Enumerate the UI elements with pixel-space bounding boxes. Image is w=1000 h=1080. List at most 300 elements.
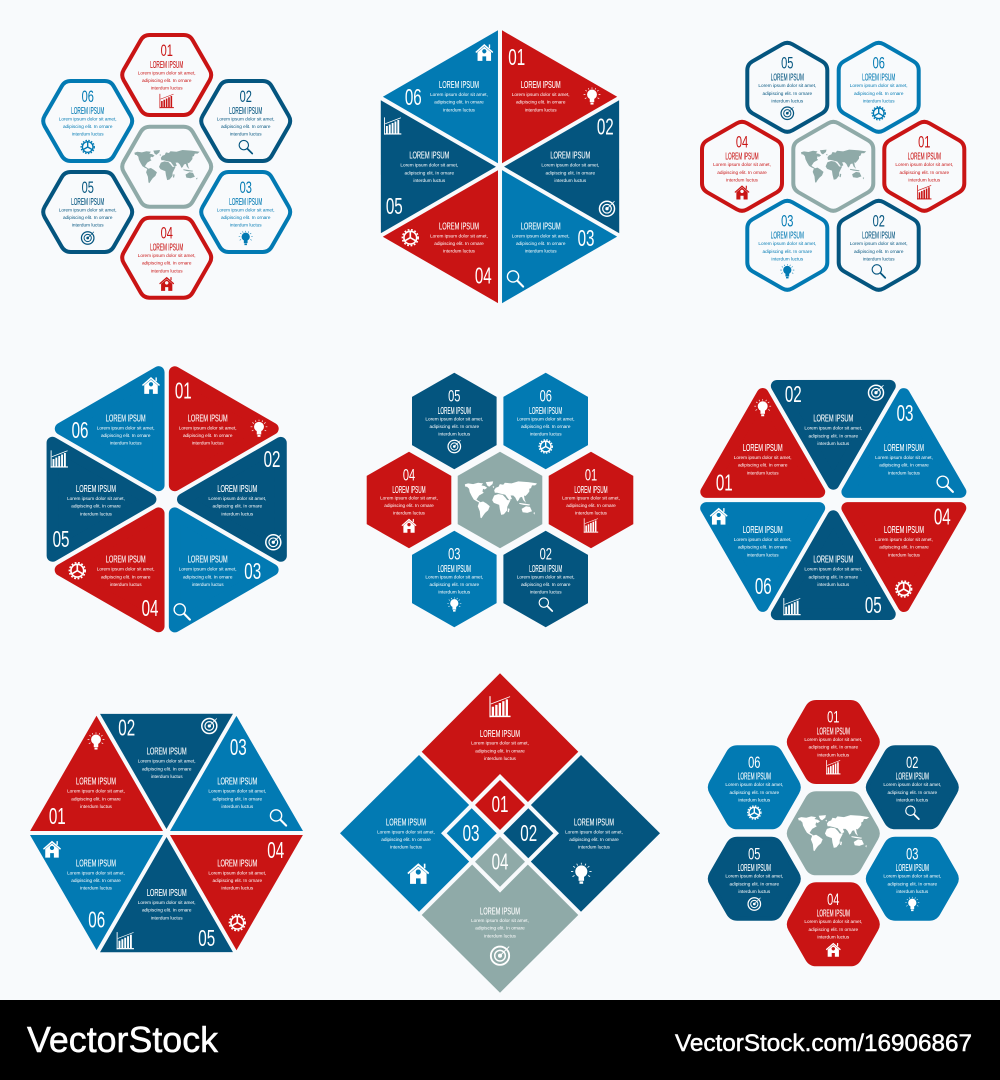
hexagon 01: 01 bbox=[161, 41, 173, 59]
hexagon 03: Lorem ipsum dolor sit amet, bbox=[425, 574, 483, 579]
hexagon 01: Lorem ipsum dolor sit amet, bbox=[895, 162, 953, 167]
segment 06 bbox=[383, 0, 556, 163]
segment 03: Lorem ipsum dolor sit amet, bbox=[208, 789, 266, 794]
segment 06: LOREM IPSUM bbox=[106, 411, 146, 424]
hexagon 03 bbox=[412, 531, 497, 627]
panel: rounded triangle hexagon, middle right bbox=[678, 337, 989, 663]
hexagon 06: adipiscing elit. In ornare bbox=[730, 790, 779, 795]
segment 06: LOREM IPSUM bbox=[76, 856, 116, 869]
text block 01 bbox=[471, 727, 529, 761]
hexagon 01: interdum luctus bbox=[908, 178, 941, 183]
segment 06: 06 bbox=[72, 418, 88, 444]
large diamond 04 bbox=[422, 837, 578, 993]
segment 04 bbox=[170, 835, 303, 950]
segment 01: interdum luctus bbox=[80, 804, 113, 809]
segment 06: interdum luctus bbox=[80, 886, 113, 891]
segment 01: LOREM IPSUM bbox=[743, 441, 783, 453]
segment 04: interdum luctus bbox=[888, 552, 921, 557]
hexagon 06: Lorem ipsum dolor sit amet, bbox=[725, 782, 783, 787]
segment 06: Lorem ipsum dolor sit amet, bbox=[97, 425, 155, 430]
segment 02: LOREM IPSUM bbox=[550, 149, 590, 161]
segment 05: Lorem ipsum dolor sit amet, bbox=[804, 567, 862, 572]
hexagon 06: LOREM IPSUM bbox=[738, 771, 771, 782]
hexagon 03: interdum luctus bbox=[896, 889, 929, 894]
segment 01 bbox=[175, 372, 273, 485]
segment 05: LOREM IPSUM bbox=[147, 886, 187, 898]
hexagon 05: interdum luctus bbox=[438, 432, 471, 437]
hexagon 02: Lorem ipsum dolor sit amet, bbox=[883, 782, 941, 787]
text block 03: adipiscing elit. In ornare bbox=[381, 837, 431, 842]
hexagon 03: 03 bbox=[906, 844, 919, 863]
segment 03 bbox=[126, 513, 273, 655]
segment 02: adipiscing elit. In ornare bbox=[546, 170, 595, 175]
hexagon 02: interdum luctus bbox=[530, 590, 562, 595]
hexagon 05: interdum luctus bbox=[738, 889, 771, 894]
text block 01: LOREM IPSUM bbox=[480, 727, 520, 739]
hexagon 06: LOREM IPSUM bbox=[862, 72, 895, 83]
segment 03: interdum luctus bbox=[192, 582, 224, 587]
number 03: 03 bbox=[463, 821, 479, 847]
segment 02: 02 bbox=[118, 716, 135, 742]
segment 02: interdum luctus bbox=[554, 178, 587, 183]
hexagon 03 bbox=[747, 201, 827, 290]
hexagon 02: adipiscing elit. In ornare bbox=[221, 124, 271, 129]
hexagon 01 bbox=[122, 35, 211, 115]
hexagon 03: 03 bbox=[448, 544, 461, 563]
hexagon 02 bbox=[503, 531, 588, 627]
hexagon 01: adipiscing elit. In ornare bbox=[809, 745, 858, 750]
segment 04: adipiscing elit. In ornare bbox=[213, 878, 262, 883]
hexagon 05 bbox=[747, 43, 827, 132]
large diamond 02 bbox=[502, 755, 660, 912]
hexagon 03: interdum luctus bbox=[438, 590, 471, 595]
footer background bbox=[0, 1000, 1000, 1080]
segment 06: Lorem ipsum dolor sit amet, bbox=[430, 92, 488, 97]
text block 03 bbox=[377, 816, 435, 850]
segment 04: adipiscing elit. In ornare bbox=[879, 545, 929, 550]
segment 02: LOREM IPSUM bbox=[217, 482, 257, 494]
hexagon 05: LOREM IPSUM bbox=[438, 405, 471, 417]
panel: rounded triangle hexagon, middle left bbox=[4, 344, 330, 655]
hexagon 02: LOREM IPSUM bbox=[229, 105, 262, 116]
segment 04: interdum luctus bbox=[443, 249, 476, 254]
hexagon 05: 05 bbox=[748, 844, 761, 863]
hexagon 04: adipiscing elit. In ornare bbox=[384, 503, 434, 508]
segment 06: 06 bbox=[755, 574, 772, 600]
hexagon 06: interdum luctus bbox=[72, 132, 104, 137]
segment 01: interdum luctus bbox=[192, 441, 224, 446]
segment 05: Lorem ipsum dolor sit amet, bbox=[400, 163, 458, 168]
segment 04: 04 bbox=[934, 505, 951, 531]
hexagon 04: interdum luctus bbox=[817, 935, 850, 940]
hexagon 02 bbox=[839, 201, 919, 290]
segment 06: LOREM IPSUM bbox=[743, 523, 783, 535]
segment 04: LOREM IPSUM bbox=[106, 553, 146, 565]
segment 01: adipiscing elit. In ornare bbox=[183, 433, 233, 438]
segment 05: interdum luctus bbox=[817, 582, 850, 587]
segment 05 bbox=[323, 67, 496, 233]
hexagon 05 bbox=[710, 839, 799, 919]
hexagon 03: adipiscing elit. In ornare bbox=[221, 215, 271, 220]
hexagon 05: 05 bbox=[781, 53, 794, 72]
hexagon 01 bbox=[549, 452, 633, 548]
hexagon 03: adipiscing elit. In ornare bbox=[888, 881, 937, 886]
segment 06: adipiscing elit. In ornare bbox=[101, 433, 151, 438]
segment 05: LOREM IPSUM bbox=[813, 553, 853, 565]
hexagon 04: 04 bbox=[827, 890, 840, 908]
hexagon 02: LOREM IPSUM bbox=[529, 563, 562, 575]
segment 05: interdum luctus bbox=[80, 511, 113, 516]
hexagon 03: LOREM IPSUM bbox=[896, 862, 929, 874]
segment 05: interdum luctus bbox=[413, 178, 446, 183]
hexagon 06: 06 bbox=[82, 87, 94, 105]
text block 04: LOREM IPSUM bbox=[480, 904, 520, 917]
hexagon 06: Lorem ipsum dolor sit amet, bbox=[59, 116, 117, 121]
segment 01: adipiscing elit. In ornare bbox=[71, 796, 121, 801]
hexagon 01: 01 bbox=[918, 132, 931, 151]
hexagon 06 bbox=[43, 81, 132, 161]
segment 03: interdum luctus bbox=[525, 249, 557, 254]
hexagon 01: interdum luctus bbox=[575, 511, 608, 516]
hexagon 01: 01 bbox=[827, 707, 840, 726]
segment 06: interdum luctus bbox=[747, 552, 779, 557]
segment 01: interdum luctus bbox=[747, 470, 779, 475]
segment 03: LOREM IPSUM bbox=[521, 219, 561, 232]
hexagon 05: Lorem ipsum dolor sit amet, bbox=[59, 207, 117, 212]
hexagon 01: LOREM IPSUM bbox=[150, 59, 183, 70]
segment 05: adipiscing elit. In ornare bbox=[142, 908, 192, 913]
segment 01: Lorem ipsum dolor sit amet, bbox=[179, 425, 237, 430]
hexagon 04: Lorem ipsum dolor sit amet, bbox=[713, 162, 771, 167]
hexagon 03: 03 bbox=[240, 178, 252, 196]
segment 04: Lorem ipsum dolor sit amet, bbox=[430, 233, 488, 238]
hexagon 05 bbox=[43, 172, 132, 252]
hexagon 03: LOREM IPSUM bbox=[438, 563, 471, 575]
hexagon 03 bbox=[868, 839, 957, 919]
hexagon 02: interdum luctus bbox=[230, 132, 262, 137]
hexagon 05: LOREM IPSUM bbox=[738, 862, 771, 874]
segment 02: adipiscing elit. In ornare bbox=[142, 766, 192, 771]
segment 04: LOREM IPSUM bbox=[884, 523, 924, 535]
hexagon 04: 04 bbox=[403, 465, 415, 484]
centre hexagon with world map bbox=[789, 793, 878, 873]
segment 06: 06 bbox=[405, 85, 422, 111]
segment 04: LOREM IPSUM bbox=[439, 219, 479, 232]
segment 02: 02 bbox=[597, 115, 614, 141]
segment 06 bbox=[61, 344, 207, 485]
hexagon 04: interdum luctus bbox=[726, 178, 759, 183]
hexagon 03: adipiscing elit. In ornare bbox=[763, 249, 812, 254]
segment 02: adipiscing elit. In ornare bbox=[213, 504, 262, 509]
hexagon 05: adipiscing elit. In ornare bbox=[430, 424, 479, 429]
hexagon 03: interdum luctus bbox=[230, 223, 262, 228]
segment 05: LOREM IPSUM bbox=[409, 149, 449, 161]
segment 06 bbox=[0, 777, 163, 950]
segment 04: 04 bbox=[475, 264, 492, 290]
hexagon 03 bbox=[201, 172, 290, 252]
hexagon 06 bbox=[710, 747, 799, 827]
segment 01: 01 bbox=[508, 45, 525, 71]
hexagon 05: Lorem ipsum dolor sit amet, bbox=[425, 416, 483, 421]
hexagon 04: LOREM IPSUM bbox=[150, 242, 183, 253]
segment 05: 05 bbox=[198, 926, 215, 952]
segment 01: LOREM IPSUM bbox=[521, 78, 561, 90]
hexagon 02: Lorem ipsum dolor sit amet, bbox=[217, 116, 275, 121]
hexagon 06 bbox=[503, 373, 588, 469]
hexagon 03: Lorem ipsum dolor sit amet, bbox=[217, 207, 275, 212]
hexagon 06: adipiscing elit. In ornare bbox=[854, 91, 904, 96]
segment 04: adipiscing elit. In ornare bbox=[434, 241, 484, 246]
hexagon 03: adipiscing elit. In ornare bbox=[430, 582, 479, 587]
text block 03: LOREM IPSUM bbox=[386, 816, 426, 828]
hexagon 02: 02 bbox=[240, 87, 252, 105]
text block 02: Lorem ipsum dolor sit amet, bbox=[565, 829, 623, 834]
segment 03: 03 bbox=[244, 559, 261, 585]
segment 04: Lorem ipsum dolor sit amet, bbox=[875, 537, 933, 542]
segment 02: adipiscing elit. In ornare bbox=[809, 433, 858, 438]
segment 01: 01 bbox=[175, 379, 192, 405]
segment 02: LOREM IPSUM bbox=[813, 412, 853, 424]
centre hexagon with world map bbox=[793, 122, 873, 211]
number 01: 01 bbox=[492, 792, 508, 818]
segment 06: Lorem ipsum dolor sit amet, bbox=[734, 537, 792, 542]
panel: diamond diagram, bottom centre bbox=[340, 673, 660, 993]
segment 04: LOREM IPSUM bbox=[217, 856, 257, 869]
hexagon 02 bbox=[868, 747, 957, 827]
hexagon 01: interdum luctus bbox=[151, 86, 183, 91]
segment 06: LOREM IPSUM bbox=[439, 78, 479, 90]
segment 03 bbox=[444, 170, 617, 336]
hexagon 01: adipiscing elit. In ornare bbox=[900, 170, 949, 175]
hexagon 02: interdum luctus bbox=[896, 798, 929, 803]
small diamond 04 bbox=[475, 837, 525, 887]
hexagon 06 bbox=[839, 43, 919, 132]
segment 03: LOREM IPSUM bbox=[217, 775, 257, 787]
hexagon 06: Lorem ipsum dolor sit amet, bbox=[850, 83, 908, 88]
segment 06: interdum luctus bbox=[110, 441, 142, 446]
hexagon 01 bbox=[789, 702, 878, 782]
segment 05: LOREM IPSUM bbox=[76, 482, 116, 494]
segment 05: adipiscing elit. In ornare bbox=[809, 574, 858, 579]
segment 02: 02 bbox=[785, 382, 802, 408]
hexagon 02: Lorem ipsum dolor sit amet, bbox=[850, 241, 908, 246]
segment 02: 02 bbox=[264, 447, 280, 473]
panel: filled rounded hexagon ring, bottom right bbox=[710, 702, 957, 964]
hexagon 03: Lorem ipsum dolor sit amet, bbox=[758, 241, 816, 246]
hexagon 06: adipiscing elit. In ornare bbox=[63, 124, 113, 129]
hexagon 01: LOREM IPSUM bbox=[817, 725, 850, 737]
small diamond 03 bbox=[447, 808, 497, 858]
hexagon 03: interdum luctus bbox=[771, 257, 804, 262]
hexagon 06: 06 bbox=[873, 53, 885, 72]
text block 01: adipiscing elit. In ornare bbox=[475, 748, 525, 753]
segment 03: LOREM IPSUM bbox=[884, 441, 924, 453]
panel: filled hexagon cluster, middle centre bbox=[367, 373, 633, 627]
segment 06: Lorem ipsum dolor sit amet, bbox=[67, 870, 125, 875]
icon: target bbox=[491, 947, 509, 965]
hexagon 01: interdum luctus bbox=[817, 752, 850, 757]
segment 01 bbox=[502, 30, 617, 163]
hexagon 05: adipiscing elit. In ornare bbox=[730, 881, 779, 886]
hexagon 06: interdum luctus bbox=[863, 99, 895, 104]
hexagon 01: Lorem ipsum dolor sit amet, bbox=[562, 495, 620, 500]
hexagon 01: Lorem ipsum dolor sit amet, bbox=[138, 70, 196, 75]
hexagon 05: Lorem ipsum dolor sit amet, bbox=[758, 83, 816, 88]
segment 03: Lorem ipsum dolor sit amet, bbox=[512, 233, 570, 238]
panel: outlined hexagon ring, top left bbox=[43, 35, 290, 298]
hexagon 04: Lorem ipsum dolor sit amet, bbox=[380, 495, 438, 500]
hexagon 06: Lorem ipsum dolor sit amet, bbox=[517, 416, 575, 421]
segment 02: LOREM IPSUM bbox=[147, 745, 187, 757]
hexagon 05: 05 bbox=[82, 178, 94, 196]
hexagon 06: adipiscing elit. In ornare bbox=[521, 424, 571, 429]
hexagon 02: adipiscing elit. In ornare bbox=[854, 249, 904, 254]
segment 02: interdum luctus bbox=[817, 441, 850, 446]
segment 04 bbox=[847, 505, 960, 606]
segment 02 bbox=[100, 656, 266, 829]
segment 03: adipiscing elit. In ornare bbox=[516, 241, 566, 246]
segment 05: Lorem ipsum dolor sit amet, bbox=[67, 496, 125, 501]
text block 04: adipiscing elit. In ornare bbox=[475, 926, 525, 931]
segment 03: interdum luctus bbox=[221, 804, 254, 809]
segment 05: 05 bbox=[53, 527, 70, 553]
hexagon 06: LOREM IPSUM bbox=[71, 105, 104, 116]
watermark footer bar bbox=[0, 1000, 1000, 1080]
icon: bulb bbox=[571, 863, 592, 884]
hexagon 03: LOREM IPSUM bbox=[771, 230, 804, 241]
number 02: 02 bbox=[520, 821, 537, 847]
segment 04 bbox=[383, 170, 498, 303]
segment 01: adipiscing elit. In ornare bbox=[516, 100, 566, 105]
hexagon 01 bbox=[884, 122, 964, 211]
text block 02: adipiscing elit. In ornare bbox=[569, 837, 619, 842]
segment 01: Lorem ipsum dolor sit amet, bbox=[67, 789, 125, 794]
text block 02 bbox=[565, 816, 623, 850]
hexagon 04: adipiscing elit. In ornare bbox=[717, 170, 767, 175]
hexagon 04: Lorem ipsum dolor sit amet, bbox=[138, 253, 196, 258]
hexagon 04: interdum luctus bbox=[151, 268, 183, 273]
segment 06 bbox=[678, 459, 819, 606]
segment 05 bbox=[67, 837, 233, 1010]
hexagon 04 bbox=[702, 122, 782, 211]
hexagon 04: LOREM IPSUM bbox=[817, 908, 850, 919]
hexagon 02: LOREM IPSUM bbox=[896, 771, 929, 782]
segment 06: 06 bbox=[88, 908, 105, 934]
hexagon 02: interdum luctus bbox=[863, 257, 895, 262]
hexagon 05: adipiscing elit. In ornare bbox=[763, 91, 812, 96]
footer logo: VectorStock bbox=[27, 1019, 219, 1060]
segment 04: adipiscing elit. In ornare bbox=[101, 574, 151, 579]
hexagon 01: 01 bbox=[585, 465, 597, 484]
hexagon 06: interdum luctus bbox=[738, 798, 771, 803]
segment 02: Lorem ipsum dolor sit amet, bbox=[804, 426, 862, 431]
hexagon 05 bbox=[412, 373, 497, 469]
segment 02: Lorem ipsum dolor sit amet, bbox=[541, 163, 599, 168]
panel: outlined hexagon ring, top right bbox=[702, 43, 964, 290]
hexagon 01: Lorem ipsum dolor sit amet, bbox=[804, 737, 862, 742]
segment 03: 03 bbox=[578, 226, 594, 252]
segment 04: interdum luctus bbox=[221, 886, 254, 891]
hexagon 04: LOREM IPSUM bbox=[392, 484, 426, 496]
hexagon 05: LOREM IPSUM bbox=[71, 196, 104, 207]
panel: sharp triangle hexagon, bottom left bbox=[0, 656, 336, 1010]
segment 02: interdum luctus bbox=[151, 774, 183, 779]
segment 01: Lorem ipsum dolor sit amet, bbox=[512, 92, 570, 97]
segment 04: Lorem ipsum dolor sit amet, bbox=[208, 870, 266, 875]
segment 02: interdum luctus bbox=[221, 511, 254, 516]
hexagon 03: 03 bbox=[781, 211, 794, 230]
hexagon 04: 04 bbox=[161, 223, 173, 242]
hexagon 04: interdum luctus bbox=[393, 511, 426, 516]
text block 01: Lorem ipsum dolor sit amet, bbox=[471, 741, 529, 746]
segment 01: Lorem ipsum dolor sit amet, bbox=[734, 455, 792, 460]
text block 03: Lorem ipsum dolor sit amet, bbox=[377, 829, 435, 834]
hexagon 03: LOREM IPSUM bbox=[229, 196, 262, 207]
hexagon 04: adipiscing elit. In ornare bbox=[809, 927, 858, 932]
segment 04: interdum luctus bbox=[110, 582, 142, 587]
hexagon 05: 05 bbox=[448, 386, 461, 405]
large diamond 01 bbox=[422, 673, 578, 830]
hexagon 01: LOREM IPSUM bbox=[908, 151, 941, 162]
segment 02 bbox=[183, 443, 330, 584]
hexagon 05: Lorem ipsum dolor sit amet, bbox=[725, 874, 783, 879]
segment 03 bbox=[847, 394, 989, 541]
segment 01: adipiscing elit. In ornare bbox=[738, 463, 788, 468]
hexagon 01: LOREM IPSUM bbox=[574, 484, 608, 496]
hexagon 04 bbox=[789, 884, 878, 964]
segment 04: Lorem ipsum dolor sit amet, bbox=[97, 567, 155, 572]
hexagon 06: 06 bbox=[748, 753, 761, 771]
hexagon 06: interdum luctus bbox=[530, 432, 562, 437]
text block 02: LOREM IPSUM bbox=[574, 816, 614, 828]
segment 03: Lorem ipsum dolor sit amet, bbox=[179, 567, 237, 572]
large diamond 03 bbox=[340, 755, 498, 912]
segment 01: LOREM IPSUM bbox=[76, 775, 116, 787]
segment 01 bbox=[30, 716, 163, 831]
number 04: 04 bbox=[492, 850, 509, 876]
segment 04: 04 bbox=[142, 596, 159, 622]
segment 02 bbox=[504, 100, 677, 266]
hexagon 04: Lorem ipsum dolor sit amet, bbox=[804, 919, 862, 924]
hexagon 02: 02 bbox=[906, 753, 919, 771]
segment 03: adipiscing elit. In ornare bbox=[213, 796, 262, 801]
segment 03: 03 bbox=[897, 401, 913, 427]
hexagon 02: LOREM IPSUM bbox=[862, 230, 895, 241]
segment 01: interdum luctus bbox=[525, 107, 557, 112]
segment 04: 04 bbox=[267, 838, 284, 864]
segment 01: LOREM IPSUM bbox=[188, 411, 228, 424]
hexagon 01: adipiscing elit. In ornare bbox=[566, 503, 616, 508]
hexagon 05: interdum luctus bbox=[72, 223, 104, 228]
hexagon 04: adipiscing elit. In ornare bbox=[142, 261, 192, 266]
segment 02: Lorem ipsum dolor sit amet, bbox=[208, 496, 266, 501]
icon: chart bbox=[489, 696, 511, 717]
hexagon 03: Lorem ipsum dolor sit amet, bbox=[883, 874, 941, 879]
segment 06: adipiscing elit. In ornare bbox=[71, 878, 121, 883]
hexagon 02: 02 bbox=[873, 211, 885, 230]
hexagon 05: adipiscing elit. In ornare bbox=[63, 215, 113, 220]
segment 05 bbox=[749, 516, 890, 663]
footer image id: VectorStock.com/16906867 bbox=[675, 1030, 972, 1057]
segment 05: 05 bbox=[386, 194, 403, 220]
segment 01: 01 bbox=[49, 804, 66, 830]
segment 03: adipiscing elit. In ornare bbox=[183, 574, 233, 579]
text block 04: Lorem ipsum dolor sit amet, bbox=[471, 918, 529, 923]
segment 06: adipiscing elit. In ornare bbox=[738, 545, 788, 550]
segment 05: adipiscing elit. In ornare bbox=[71, 504, 121, 509]
hexagon 02: Lorem ipsum dolor sit amet, bbox=[517, 574, 575, 579]
text block 02: interdum luctus bbox=[578, 845, 611, 850]
